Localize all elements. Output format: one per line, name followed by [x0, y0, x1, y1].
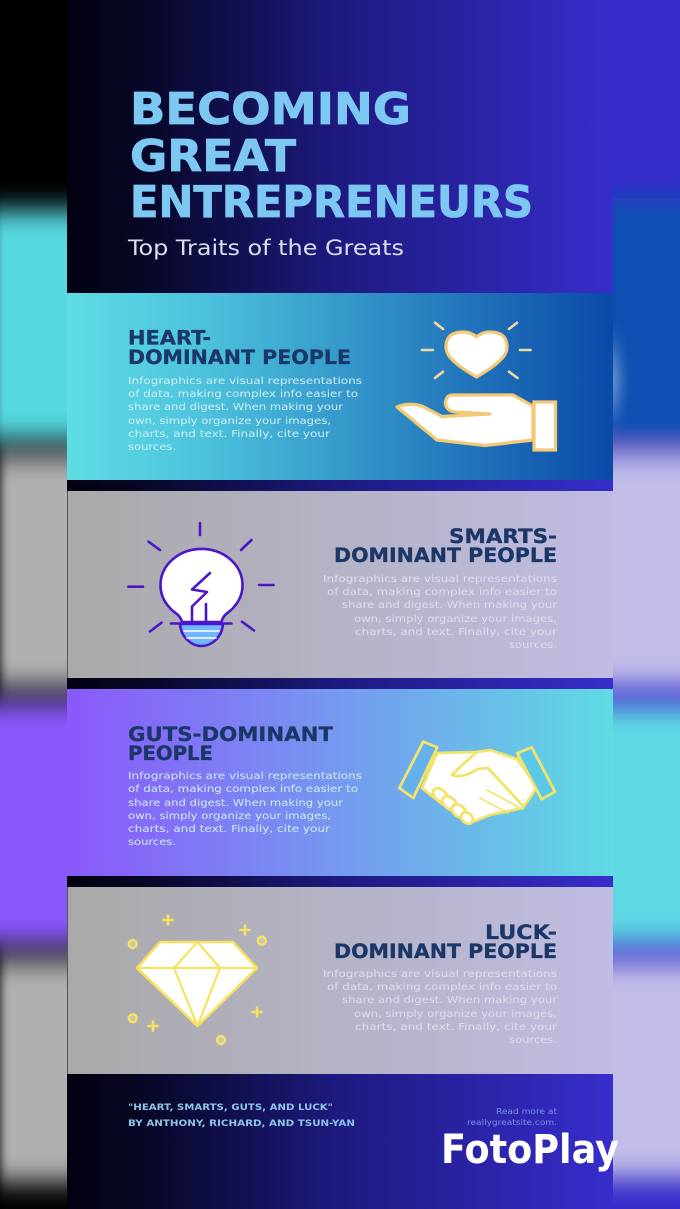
panel: smarts-dominant people — [67, 491, 613, 678]
text block: smarts: share and digest. When making your — [342, 600, 558, 611]
text block: heart: Infographics are visual representations — [128, 376, 362, 387]
text block: smarts: sources. — [509, 640, 557, 651]
footer: read more link — [467, 1107, 557, 1127]
text block: guts: sources. — [128, 837, 176, 848]
heading: smarts: SMARTS- — [449, 525, 557, 548]
text block: heart — [128, 376, 362, 453]
blurred right background strip — [613, 0, 680, 1209]
title: BECOMING — [130, 84, 411, 135]
footer: source credit: BY ANTHONY, RICHARD, AND TSUN-YAN — [128, 1119, 355, 1129]
text block: smarts: of data, making complex info easier to — [327, 587, 557, 598]
text block: luck — [323, 969, 558, 1046]
stripe — [67, 876, 613, 887]
text block: smarts: own, simply organize your images, — [354, 614, 557, 625]
icon: heart in hand — [397, 323, 556, 450]
heading: luck: LUCK- — [485, 921, 557, 944]
heading: guts: PEOPLE — [128, 742, 213, 765]
title: ENTREPRENEURS — [130, 177, 533, 228]
text block: luck: charts, and text. Finally, cite your — [355, 1022, 558, 1033]
heading: guts: GUTS-DOMINANT — [128, 723, 334, 746]
text block: luck: own, simply organize your images, — [354, 1009, 557, 1020]
icon: light bulb — [128, 523, 274, 646]
icon: handshake — [399, 742, 555, 826]
blurred left background strip — [0, 188, 67, 1202]
text block: guts: Infographics are visual representations — [128, 771, 362, 782]
text block: smarts: charts, and text. Finally, cite your — [355, 627, 558, 638]
heading: guts — [128, 723, 334, 765]
panel: heart-dominant people — [67, 293, 613, 480]
text block: heart: of data, making complex info easier to — [128, 389, 358, 400]
text block: guts: share and digest. When making your — [128, 798, 344, 809]
text block: heart: charts, and text. Finally, cite your — [128, 429, 331, 440]
heading: heart: HEART- — [128, 326, 211, 350]
footer: read more link: Read more at — [496, 1107, 557, 1116]
heading: heart: DOMINANT PEOPLE — [128, 346, 351, 369]
panel: luck-dominant people — [67, 887, 613, 1074]
heading: luck: DOMINANT PEOPLE — [334, 940, 557, 963]
text block: heart: share and digest. When making your — [128, 402, 344, 413]
text block: heart: own, simply organize your images, — [128, 416, 331, 427]
footer: source credit — [128, 1103, 355, 1129]
text block: luck: share and digest. When making your — [342, 995, 558, 1006]
heading: smarts: DOMINANT PEOPLE — [334, 544, 557, 567]
text block: heart: sources. — [128, 442, 176, 453]
text block: luck: sources. — [509, 1035, 557, 1046]
text block: luck: of data, making complex info easier to — [327, 982, 557, 993]
icon: diamond — [129, 916, 266, 1044]
heading: smarts — [334, 525, 557, 567]
text block: smarts: Infographics are visual representations — [323, 574, 557, 585]
heading: heart — [128, 326, 351, 369]
text block: guts: charts, and text. Finally, cite your — [128, 824, 331, 835]
subtitle: Top Traits of the Greats — [127, 236, 404, 260]
text block: luck: Infographics are visual representations — [323, 969, 557, 980]
stripe — [67, 480, 613, 491]
panel: guts-dominant people — [67, 689, 613, 876]
heading: luck — [334, 921, 557, 963]
text block: smarts — [323, 574, 558, 651]
stripe — [67, 678, 613, 689]
title — [130, 84, 533, 228]
title: GREAT — [130, 131, 296, 182]
footer: source credit: "HEART, SMARTS, GUTS, AND LUCK" — [128, 1103, 333, 1113]
text block: guts: of data, making complex info easier to — [128, 784, 358, 795]
text block: guts — [128, 771, 362, 848]
text block: guts: own, simply organize your images, — [128, 811, 331, 822]
watermark: FotoPlay: FotoPlay — [441, 1127, 619, 1173]
footer: read more link: reallygreatsite.com. — [467, 1118, 557, 1127]
